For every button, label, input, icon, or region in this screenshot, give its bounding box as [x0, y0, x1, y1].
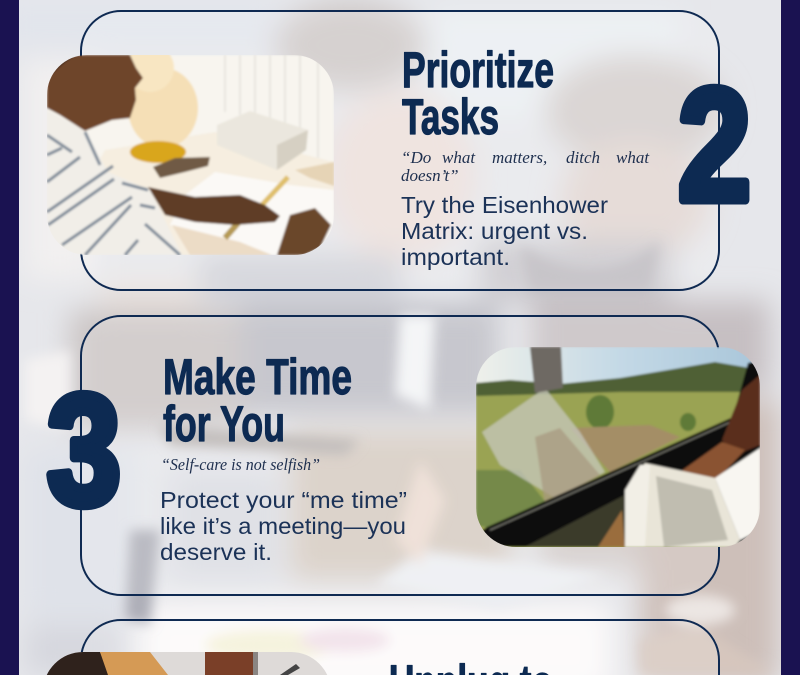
quote: “Do: [401, 148, 431, 167]
quote: what: [442, 148, 476, 167]
heading: Prioritize Tasks: Tasks: [402, 89, 499, 145]
number 2: 2: [678, 55, 751, 234]
quote: doesn’t”: [401, 166, 459, 185]
panel: prioritize tasks: [47, 11, 751, 290]
card outline 4: [81, 620, 719, 675]
body text: deserve it.: [160, 539, 272, 565]
heading: Prioritize Tasks: [402, 42, 554, 145]
body text: Protect your “me time”: [160, 487, 407, 513]
panel: unplug: [43, 620, 719, 675]
photo: person relaxing: [43, 652, 331, 675]
body text: Try the Eisenhower: [401, 192, 608, 218]
heading: Make Time for You: for You: [163, 396, 285, 452]
number 3: 3: [47, 363, 121, 538]
photo: woman writing at desk: [47, 44, 334, 255]
body text: important.: [401, 244, 510, 270]
heading: Make Time for You: [163, 349, 352, 452]
heading: Make Time for You: Make Time: [163, 349, 352, 405]
body text: [401, 192, 608, 270]
photo: reading on a train: [476, 347, 760, 550]
body text: like it’s a meeting—you: [160, 513, 406, 539]
panel: make time for you: [47, 316, 760, 595]
heading: Prioritize Tasks: Prioritize: [402, 42, 554, 98]
quote: what: [616, 148, 650, 167]
card outline 2: [81, 11, 719, 290]
card outline 3: [81, 316, 719, 595]
body text: Matrix: urgent vs.: [401, 218, 588, 244]
quote: matters,: [492, 148, 547, 167]
quote: ditch: [566, 148, 600, 167]
body text: [160, 487, 407, 565]
quote: “Self-care is not selfish”: [161, 455, 320, 474]
